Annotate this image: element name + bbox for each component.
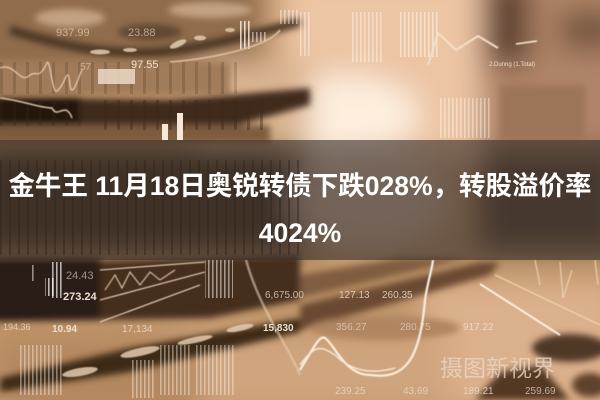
title: 金牛王 11月18日奥锐转债下跌028%，转股溢价率 (8, 171, 592, 201)
small ticker numbers: 43.69 (403, 386, 428, 397)
small ticker numbers: 24.43 (66, 270, 94, 282)
small ticker numbers: 6,675.00 (265, 290, 304, 301)
small ticker numbers: 127.13 (339, 290, 370, 301)
title band (0, 140, 600, 260)
small ticker numbers: 273.24 (63, 291, 98, 303)
small ticker numbers: 15,830 (263, 323, 294, 334)
small ticker numbers: 280.75 (400, 322, 431, 333)
small ticker numbers: 356.27 (336, 322, 367, 333)
small ticker numbers: 23.88 (128, 27, 156, 39)
small ticker numbers: 10.94 (52, 324, 77, 335)
title (8, 171, 592, 248)
small ticker numbers: 194.36 (3, 322, 31, 332)
chart ribs and candlestick bars (0, 10, 490, 398)
watermark: 摄图新视界 (440, 355, 555, 381)
small ticker numbers: 189.21 (463, 386, 494, 397)
small ticker numbers: 937.99 (56, 27, 90, 39)
ribbon highlights (62, 28, 254, 379)
title: 4024% (259, 218, 341, 248)
small ticker numbers: 917.22 (463, 322, 494, 333)
small ticker numbers: 97.55 (131, 59, 159, 71)
small ticker numbers: 239.25 (335, 386, 366, 397)
small ticker numbers: 260.35 (382, 290, 413, 301)
small ticker numbers: 57 (80, 62, 92, 73)
small ticker numbers: 259.69 (525, 386, 556, 397)
small ticker numbers: 2.Dunng (1.Total) (489, 62, 535, 68)
small ticker numbers: 17,134 (122, 324, 153, 335)
